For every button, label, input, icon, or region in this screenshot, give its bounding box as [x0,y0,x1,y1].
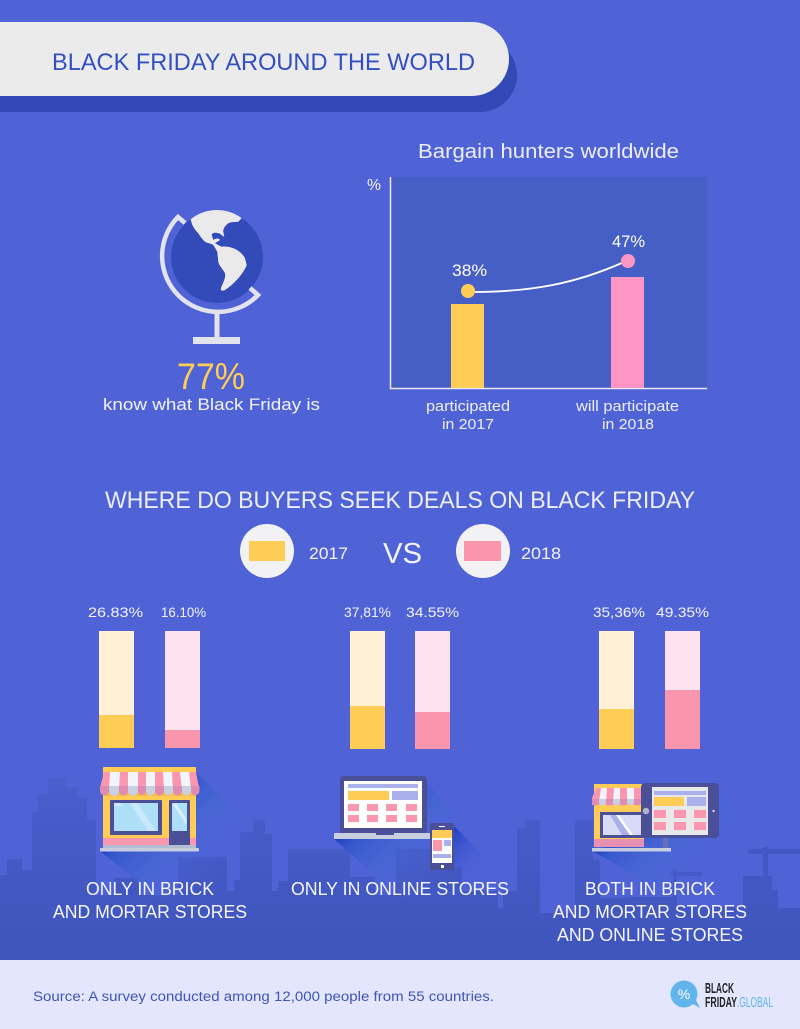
legend swatch: 2018 [456,524,510,578]
logo: % [678,986,690,1002]
caption: both [553,879,747,945]
marker: 2017 [461,284,475,298]
chart heading: Bargain hunters worldwide [418,141,679,163]
source: Source: A survey conducted among 12,000 people from 55 countries. [33,989,494,1004]
trend line [472,262,624,292]
vs: VS [383,538,422,570]
city skyline [0,778,800,960]
bars: online: 37,81% [344,604,391,620]
value: 47%: 47% [612,232,645,251]
legend label: 2017: 2017 [309,544,348,563]
caption: brick and mortar: ONLY IN BRICK [86,879,214,899]
legend swatch: 2017 [240,524,294,578]
bars: online [344,604,459,749]
section heading: WHERE DO BUYERS SEEK DEALS ON BLACK FRIDAY [105,487,695,514]
caption: brick and mortar [53,879,247,922]
bars: online: 34.55% [406,604,459,620]
caption: both: AND MORTAR STORES [553,902,747,922]
icon: store and tablet [592,783,780,905]
bars: brick and mortar: 26.83% [88,604,143,620]
header shadow [0,38,517,112]
logo: BLACK [705,981,734,997]
construction cranes [670,847,800,900]
header [0,22,517,112]
caption: online: ONLY IN ONLINE STORES [291,879,509,899]
marker: 2018 [621,254,635,268]
logo [670,980,773,1011]
value: 38%: 38% [452,261,487,280]
stat caption: know what Black Friday is [103,395,320,414]
label: participated in 2017: participated [426,399,510,415]
bars: brick and mortar: 16.10% [161,604,206,620]
bar: 2017 [451,304,484,388]
axis unit: % [367,177,381,194]
caption: brick and mortar: AND MORTAR STORES [53,902,247,922]
stat value: 77% [177,356,245,397]
icon: laptop and phone [334,776,510,915]
bars: both: 49.35% [656,604,709,620]
label: will participate in 2018: will participate [575,399,679,415]
legend [240,524,561,578]
logo: FRIDAY [705,995,737,1011]
title: BLACK FRIDAY AROUND THE WORLD [52,49,475,76]
logo: .GLOBAL [737,995,773,1011]
icon: globe [162,210,263,344]
bars: both [593,604,709,749]
legend label: 2018: 2018 [521,544,561,563]
label: participated in 2017 [426,399,510,433]
bars: both: 35,36% [593,604,645,620]
label: will participate in 2018: in 2018 [602,417,654,433]
stat: 77% [103,356,320,414]
bars: brick and mortar [88,604,206,748]
label: participated in 2017: in 2017 [442,417,494,433]
label: will participate in 2018 [575,399,679,433]
chart: bargain hunters [367,177,707,433]
caption: both: BOTH IN BRICK [585,879,715,899]
bar: 2018 [611,277,644,388]
footer [0,960,800,1029]
icon: store [100,767,290,925]
header pill [0,22,509,96]
caption: both: AND ONLINE STORES [557,925,743,945]
